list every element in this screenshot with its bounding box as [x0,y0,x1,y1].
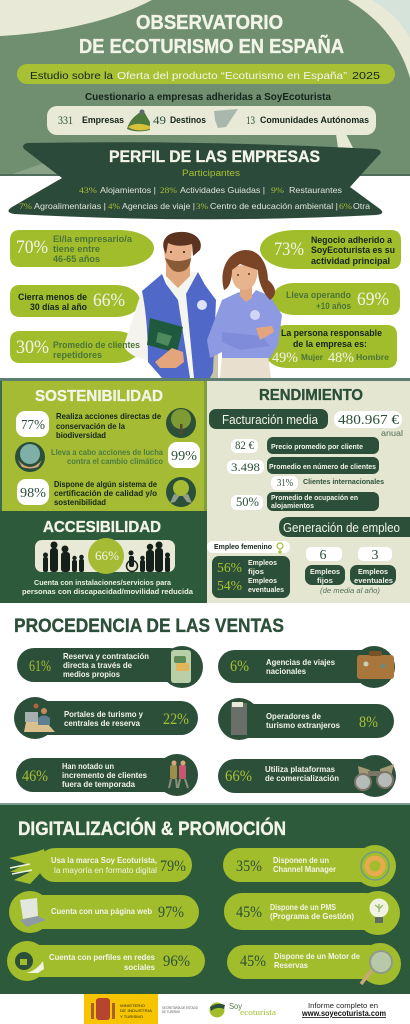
item: 66%: Utiliza plataformas [265,765,335,774]
participants row 1: 9% [271,185,284,195]
participants row 2: 4% [108,201,120,211]
stat: 98%: Dispone de algún sistema de [54,480,157,489]
icon: binoculars [355,764,394,790]
stat: 69% [272,283,400,315]
secretaria de estado: SECRETARÍA DE ESTADO [162,1006,198,1010]
item: 79% [9,848,192,884]
item: 79%: Usa la marca Soy Ecoturista, [51,856,157,865]
icon: medal [166,477,196,507]
empleo femenino: 56% [217,561,242,576]
illustration: man with vest [124,232,218,378]
panel: procedencia de las ventas [0,603,410,805]
metric: numero de clientes: Promedio en número de clientes [269,462,376,471]
participants row 2: 7% [19,201,32,211]
stat: 77%: biodiversidad [56,431,106,440]
item: 8%: 8% [359,714,378,731]
stat: 99%: Lleva a cabo acciones de lucha [51,448,163,457]
icon: magnifying glass [361,951,392,984]
item: 45% motor: Reservas [274,961,308,970]
participants row 1: 43% [79,185,97,195]
stat: 70%: 46-65 años [53,254,100,264]
logo: ministerio: MINISTERIO [120,1004,145,1008]
note: (de media al año) [320,588,380,595]
stat: 73%: 73% [274,239,304,260]
empleo femenino: Empleos [248,560,277,567]
item: 61%: directa a través de [63,661,132,670]
icon: tickets [231,702,247,735]
panel: rendimiento [204,381,410,603]
heading: PROCEDENCIA DE LAS VENTAS [14,616,284,637]
item: 61%: Reserva y contratación [63,652,149,661]
item: 35%: Channel Manager [273,865,337,874]
title: OBSERVATORIO [136,12,283,34]
item: 66%: 66% [225,768,252,785]
stat: 98%: certificación de calidad y/o [54,489,157,498]
stat: 66%: Cierra menos de [18,292,87,302]
empleos fijos: Empleos [310,567,340,576]
stat: 77%: 77% [21,418,45,433]
item: 46%: Han notado un [62,762,114,771]
item: 97%: 97% [158,904,184,921]
icon: suitcase [357,651,394,679]
participants row 2: 6% [339,201,352,211]
item: 46%: incremento de clientes [62,771,147,780]
item: 45% PMS [224,891,400,935]
stat text: responsable: de la empresa es: [293,339,367,349]
metric: clientes internacionales: Clientes internacionales [303,479,384,486]
stat text: responsable: 48% [328,350,354,366]
title: DE ECOTURISMO EN ESPAÑA [79,35,344,58]
stat: 73%: SoyEcoturista es su [311,245,395,255]
metric: precio promedio: Precio promedio por cliente [271,442,363,451]
generacion de empleo heading [279,517,410,537]
logo: ministerio [84,994,158,1024]
logo: soyecoturista: ecoturista [240,1008,277,1017]
metric: precio promedio: 82 € [235,440,254,452]
item: 6% [218,646,395,688]
strip with silhouettes [35,540,175,572]
subtitle pill: Oferta del producto “Ecoturismo en España” [117,70,348,82]
stat: 77%: conservación de la [56,422,125,431]
icon: landscape [127,110,150,131]
participants counts strip: Destinos [170,115,206,125]
icon: map of Spain [214,109,238,128]
empleos eventuales [350,547,396,585]
stat: 69%: 69% [357,289,389,310]
panel: sostenibilidad [0,378,410,511]
participants row 1: Actividades Guiadas | [180,185,265,195]
stat text: responsable: Hombre [356,352,389,362]
metric: clientes internacionales: 31% [277,478,293,489]
item: 6%: nacionales [266,667,306,676]
badge: 66%: 66% [95,548,119,563]
panel: digitalización y promoción [0,805,410,994]
icon: brand leaf [9,849,47,884]
empleos fijos [305,547,345,585]
participants counts strip: 331 [58,113,73,127]
participants row 1 [79,185,342,195]
header background [0,0,410,176]
participants row 2: 3% [196,201,208,211]
title [79,12,344,58]
report link: www.soyecoturista.com [301,1009,386,1018]
empleo femenino: Empleo femenino [214,544,272,551]
item: 22% [14,697,198,739]
item: 46%: 46% [22,768,48,785]
heading: DIGITALIZACIÓN & PROMOCIÓN [18,818,286,840]
empleos fijos: 6 [320,548,326,563]
stat: 70% [10,230,154,267]
stat: 70%: tiene entre [53,244,100,254]
metric: numero de clientes: 3.498 [231,462,260,474]
stat: 69%: Lleva operando [286,290,351,300]
item: 79%: 79% [160,858,186,875]
footer [0,994,410,1024]
item: 61%: medios propios [63,670,120,679]
icon: people at desk [24,704,55,732]
stat: 99%: 99% [171,449,197,464]
item: 6%: 6% [230,658,249,675]
report link: Informe completo en [308,1001,378,1010]
item: 61%: 61% [29,658,51,675]
item: 35% [223,845,396,887]
participants counts strip: 13 [246,113,255,127]
item: 8%: turismo extranjeros [266,721,340,730]
participants row 2: Centro de educación ambiental | [210,201,338,211]
logo: ministerio: Y TURISMO [120,1015,143,1019]
item: 96%: sociales [124,963,155,972]
description: Cuenta con instalaciones/servicios para [34,578,172,587]
item: 96%: Cuenta con perfiles en redes [49,953,155,962]
subtitle pill: Estudio sobre la [30,70,113,82]
description: personas con discapacidad/movilidad reducida [22,587,194,596]
item: 61% [17,646,203,688]
item: 35%: 35% [236,858,262,875]
item: 45% motor [227,943,401,985]
stat: 73%: Negocio adherido a [311,235,393,245]
item: 45% motor: Dispone de un Motor de [274,952,360,961]
empleo femenino: fijos [248,569,264,576]
stat: 66%: 66% [93,290,125,311]
item: 96% [7,941,205,981]
item: 66%: de comercialización [265,774,339,783]
empleo femenino: Empleos [248,578,277,585]
item: 45% PMS: 45% [236,904,262,921]
icon: hikers [169,760,188,788]
facturacion media: anual [381,429,403,438]
item: 46% [16,754,198,796]
stat: 99% [15,442,200,472]
secretaria de estado: DE TURISMO [162,1010,180,1014]
item: 97%: Cuenta con una página web [51,907,152,916]
report link [301,1001,386,1018]
item: 35%: Disponen de un [273,856,329,865]
metric: numero de clientes [227,457,379,474]
questionnaire line: Cuestionario a empresas adheridas a SoyEcoturista [85,91,331,103]
facturacion media [209,409,403,438]
participants row 2: Otra [353,201,370,211]
stat text: 30% [16,337,140,360]
item: 8%: Operadores de [266,712,321,721]
description [22,578,194,596]
participants counts strip: 49 [153,113,166,127]
stat: 98%: sostenibilidad [54,498,106,507]
participants row 1: Alojamientos | [100,185,156,195]
logo: ministerio: DE INDUSTRIA [120,1009,153,1013]
icon: gear [361,852,389,880]
icon: laptop [20,898,46,927]
item: 46%: fuera de temporada [62,780,135,789]
stat: 73% [260,230,401,269]
stat text: responsable: 49% [272,350,298,366]
heading: PERFIL DE LAS EMPRESAS [109,147,320,166]
facturacion media: 480.967 € [338,413,399,428]
icon: light bulb [370,898,388,923]
heading: SOSTENIBILIDAD [35,388,163,405]
stat text: 30%: Promedio de clientes [53,340,140,350]
stat: 30% pill [10,331,140,363]
participants row 1: Restaurantes [289,185,342,195]
item: 79%: la mayoría en formato digital [54,866,157,875]
stat: 99%: contra el cambio climático [67,457,163,466]
stat: 98% [17,477,196,507]
subtitle pill [17,64,395,84]
subtitle pill: 2025 [352,70,380,82]
panel: accesibilidad [0,511,204,603]
stat: 66% [10,285,140,317]
stat: 66%: 30 días al año [30,302,87,312]
logo: soyecoturista [210,1002,277,1018]
stat text: responsable [272,328,389,366]
participants row 1: 28% [160,185,177,195]
item: 45% PMS: (Programa de Gestión) [270,912,354,921]
participants counts strip [47,106,376,148]
empleo femenino [207,541,290,598]
stat: 70%: El/la empresario/a [53,234,133,244]
item: 8% [218,698,394,740]
icon: tree [166,408,196,438]
stat: 98%: 98% [20,486,46,501]
participants row 2: Agencias de viaje | [122,201,195,211]
empleos eventuales: 3 [372,548,378,563]
metric: ocupacion: Promedio de ocupación en [271,495,358,502]
metric: ocupacion: alojamientos [271,503,314,510]
stat: 73%: actividad principal [311,256,390,266]
metric: clientes internacionales [271,476,384,490]
empleos fijos: fijos [317,576,333,585]
participants row 2 [19,201,370,211]
item: 45% PMS: Dispone de un PMS [270,903,336,912]
participants counts strip: Comunidades Autónomas [260,115,369,125]
empleo femenino: eventuales [248,587,284,594]
item: 22%: 22% [163,711,189,728]
stat text: 30%: repetidores [53,350,102,360]
item: 66% [218,755,396,797]
empleo femenino: 54% [217,579,242,594]
stat: 77% [16,408,196,440]
secretaria de estado [162,1006,198,1014]
illustration: woman with crossed arms [207,250,282,378]
participants label: Participantes [182,168,241,178]
badge: 66% [88,538,124,574]
stat: responsable pill [263,325,397,368]
empleos eventuales: Empleos [358,567,388,576]
stat text: responsable: La persona responsable [281,328,382,338]
icon: globe in hands [15,442,45,472]
stat text: 30%: 30% [16,337,49,358]
logo: soyecoturista: Soy [229,1002,242,1011]
icon: social like [15,952,44,973]
panel: perfil de las empresas [8,142,382,219]
heading: ACCESIBILIDAD [43,519,161,536]
generacion de empleo heading: Generación de empleo [283,521,400,535]
icon: phone [171,650,191,683]
stat: 69%: +10 años [316,301,351,311]
stat: 70%: 70% [16,237,48,258]
item: 22%: centrales de reserva [64,719,140,728]
item: 97% [9,891,199,933]
metric: precio promedio [231,437,379,454]
facturacion media: Facturación media [222,413,318,427]
item: 96%: 96% [163,953,190,970]
metric: ocupacion: 50% [236,495,259,509]
stat text: responsable: Mujer [301,352,324,362]
item: 22%: Portales de turismo y [64,710,143,719]
stat: 77%: Realiza acciones directas de [56,412,161,421]
participants row 2: Agroalimentarias | [34,201,106,211]
icon: venus symbol [277,543,283,554]
heading: RENDIMIENTO [259,387,363,404]
item: 6%: Agencias de viajes [266,658,335,667]
metric: ocupacion [231,492,379,511]
item: 45% motor: 45% [240,953,266,970]
participants counts strip: Empresas [82,115,124,125]
empleos eventuales: eventuales [354,576,393,585]
